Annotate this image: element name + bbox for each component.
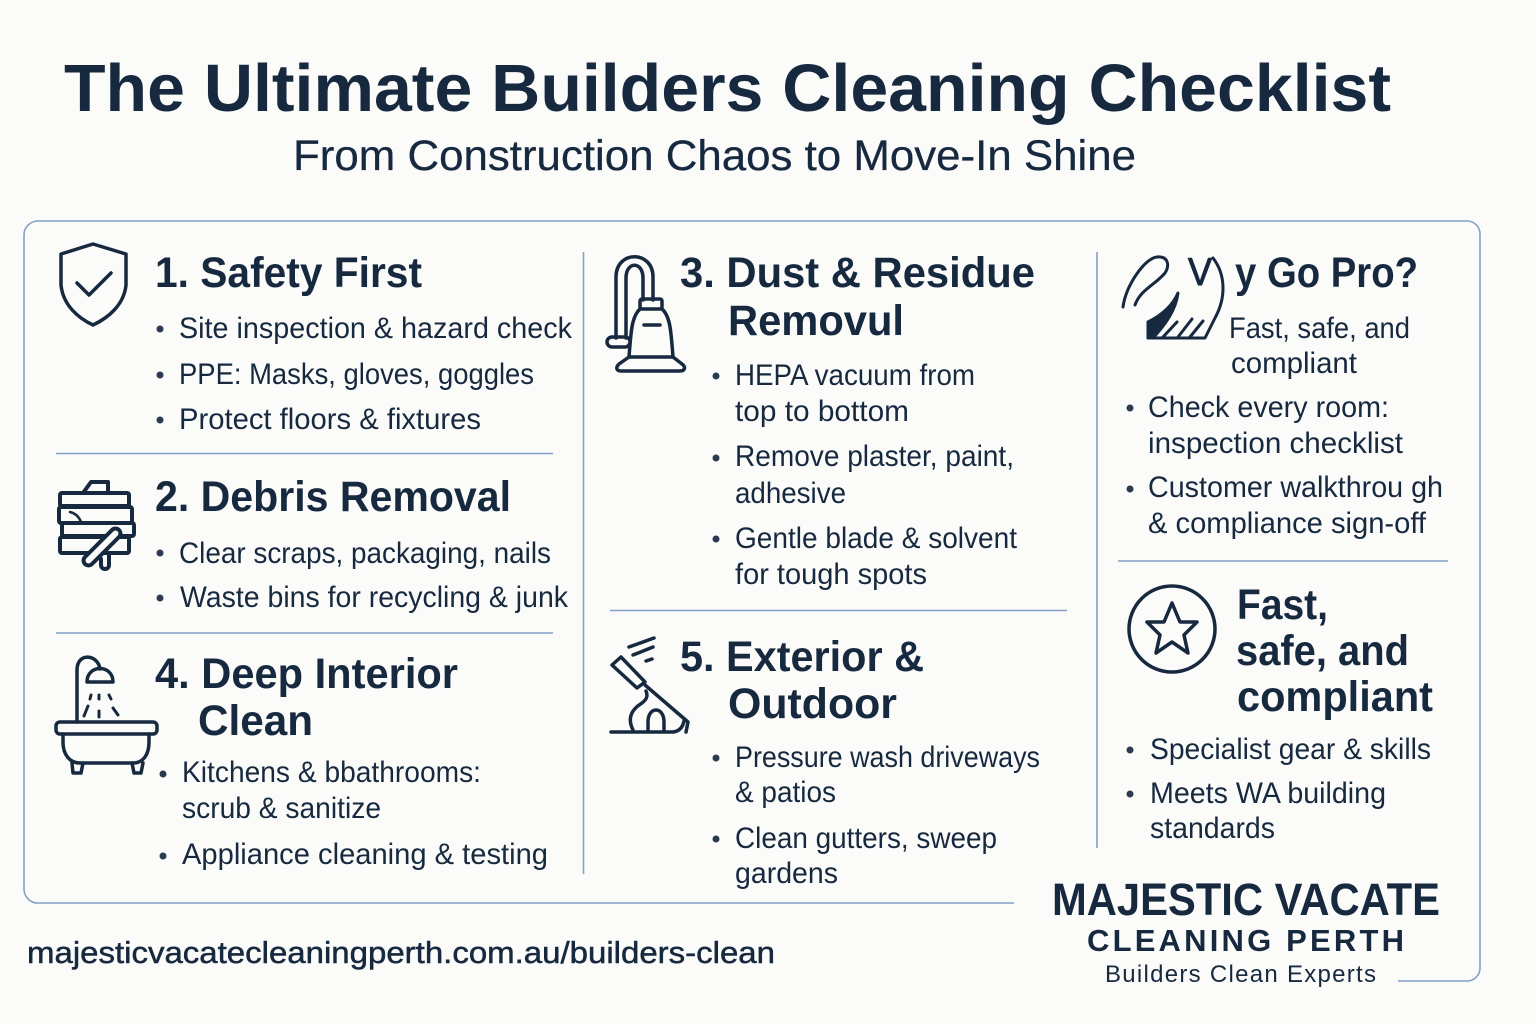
bullet list: pro checks xyxy=(1126,391,1443,540)
section 1: safety first xyxy=(61,244,572,436)
bullet list: interior: Appliance cleaning & testing xyxy=(182,838,548,871)
text block: fast, safe, and compliant xyxy=(1229,312,1410,380)
bullet list: interior: Kitchens & bbathrooms: xyxy=(182,756,481,789)
heading: exterior and outdoor: 5. Exterior & xyxy=(680,633,924,681)
brand logo block xyxy=(1052,874,1440,988)
bullet list: interior xyxy=(160,756,548,871)
bullet list: pro checks: Customer walkthrou gh xyxy=(1148,471,1443,504)
heading: deep interior clean xyxy=(155,650,458,745)
heading: exterior and outdoor xyxy=(680,633,924,728)
heading: why go pro: y Go Pro? xyxy=(1235,249,1418,297)
heading: dust and residue removal: Removul xyxy=(728,297,904,345)
bullet list: debris: Waste bins for recycling & junk xyxy=(180,581,568,614)
bullet list: interior: scrub & sanitize xyxy=(182,792,381,825)
brand logo block: CLEANING PERTH xyxy=(1087,923,1404,958)
heading: fast, safe, and compliant: compliant xyxy=(1237,673,1433,721)
bullet list: exterior: Pressure wash driveways xyxy=(735,741,1040,774)
section: why go pro xyxy=(1123,249,1443,540)
bullet list: exterior: & patios xyxy=(735,776,836,809)
subtitle: From Construction Chaos to Move-In Shine xyxy=(293,132,1136,180)
brand logo block: MAJESTIC VACATE xyxy=(1052,874,1440,925)
text block: fast, safe, and compliant: Fast, safe, and xyxy=(1229,312,1410,345)
bullet list: dust: HEPA vacuum from xyxy=(735,359,975,392)
brand logo block: Builders Clean Experts xyxy=(1105,961,1376,988)
heading: fast, safe, and compliant xyxy=(1236,581,1433,721)
bullet list: pro checks: inspection checklist xyxy=(1148,427,1403,460)
bullet list: safety xyxy=(156,312,572,436)
bullet list: exterior: Clean gutters, sweep xyxy=(735,822,997,855)
heading: fast, safe, and compliant: Fast, xyxy=(1237,581,1328,629)
section 3: dust and residue removal xyxy=(607,249,1035,591)
icon: star in circle xyxy=(1129,586,1215,672)
bullet list: pro checks: Check every room: xyxy=(1148,391,1389,424)
bullet list: credentials xyxy=(1126,733,1431,845)
section 4: deep interior clean xyxy=(56,650,548,871)
website url: majesticvacatecleaningperth.com.au/builders-clean xyxy=(27,935,775,970)
bullet list: exterior: gardens xyxy=(735,857,838,890)
icon: pressure washer xyxy=(611,638,688,732)
bullet list: credentials: Specialist gear & skills xyxy=(1150,733,1431,766)
bullet list: safety: Site inspection & hazard check xyxy=(179,312,572,345)
bullet list: safety: Protect floors & fixtures xyxy=(179,403,481,436)
bullet list: dust: top to bottom xyxy=(735,395,909,428)
bullet list: dust xyxy=(712,359,1017,591)
bullet list: dust: adhesive xyxy=(735,477,846,510)
heading: fast, safe, and compliant: safe, and xyxy=(1236,627,1409,675)
bullet list: dust: Remove plaster, paint, xyxy=(735,440,1014,473)
bullet list: pro checks: & compliance sign-off xyxy=(1148,507,1427,540)
bullet list: exterior xyxy=(712,741,1040,890)
heading: deep interior clean: 4. Deep Interior xyxy=(155,650,458,698)
heading: debris removal: 2. Debris Removal xyxy=(155,473,511,521)
icon: vacuum cleaner xyxy=(607,257,684,371)
bullet list: debris: Clear scraps, packaging, nails xyxy=(179,537,551,570)
heading: exterior and outdoor: Outdoor xyxy=(728,680,897,728)
bullet list: credentials: Meets WA building xyxy=(1150,777,1386,810)
section 5: exterior and outdoor xyxy=(611,633,1040,890)
heading: dust and residue removal: 3. Dust & Residue xyxy=(680,249,1035,297)
bullet list: safety: PPE: Masks, gloves, goggles xyxy=(179,358,534,391)
heading: dust and residue removal xyxy=(680,249,1035,345)
icon: bathtub with shower xyxy=(56,657,157,773)
bullet list: debris xyxy=(156,537,568,614)
icon: shield with check xyxy=(61,244,126,325)
bullet list: dust: for tough spots xyxy=(735,558,927,591)
text block: fast, safe, and compliant: compliant xyxy=(1231,347,1357,380)
bullet list: credentials: standards xyxy=(1150,812,1275,845)
icon: sweeping brush xyxy=(1123,257,1223,338)
heading: safety first: 1. Safety First xyxy=(155,249,422,297)
icon: stacked debris boards xyxy=(59,482,134,569)
section 2: debris removal xyxy=(59,473,568,614)
heading: deep interior clean: Clean xyxy=(198,697,313,745)
bullet list: dust: Gentle blade & solvent xyxy=(735,522,1017,555)
heading: why go pro: V xyxy=(1188,251,1212,294)
panel frame xyxy=(24,221,1480,981)
section: fast, safe, and compliant xyxy=(1126,581,1433,845)
title: The Ultimate Builders Cleaning Checklist xyxy=(64,51,1391,126)
